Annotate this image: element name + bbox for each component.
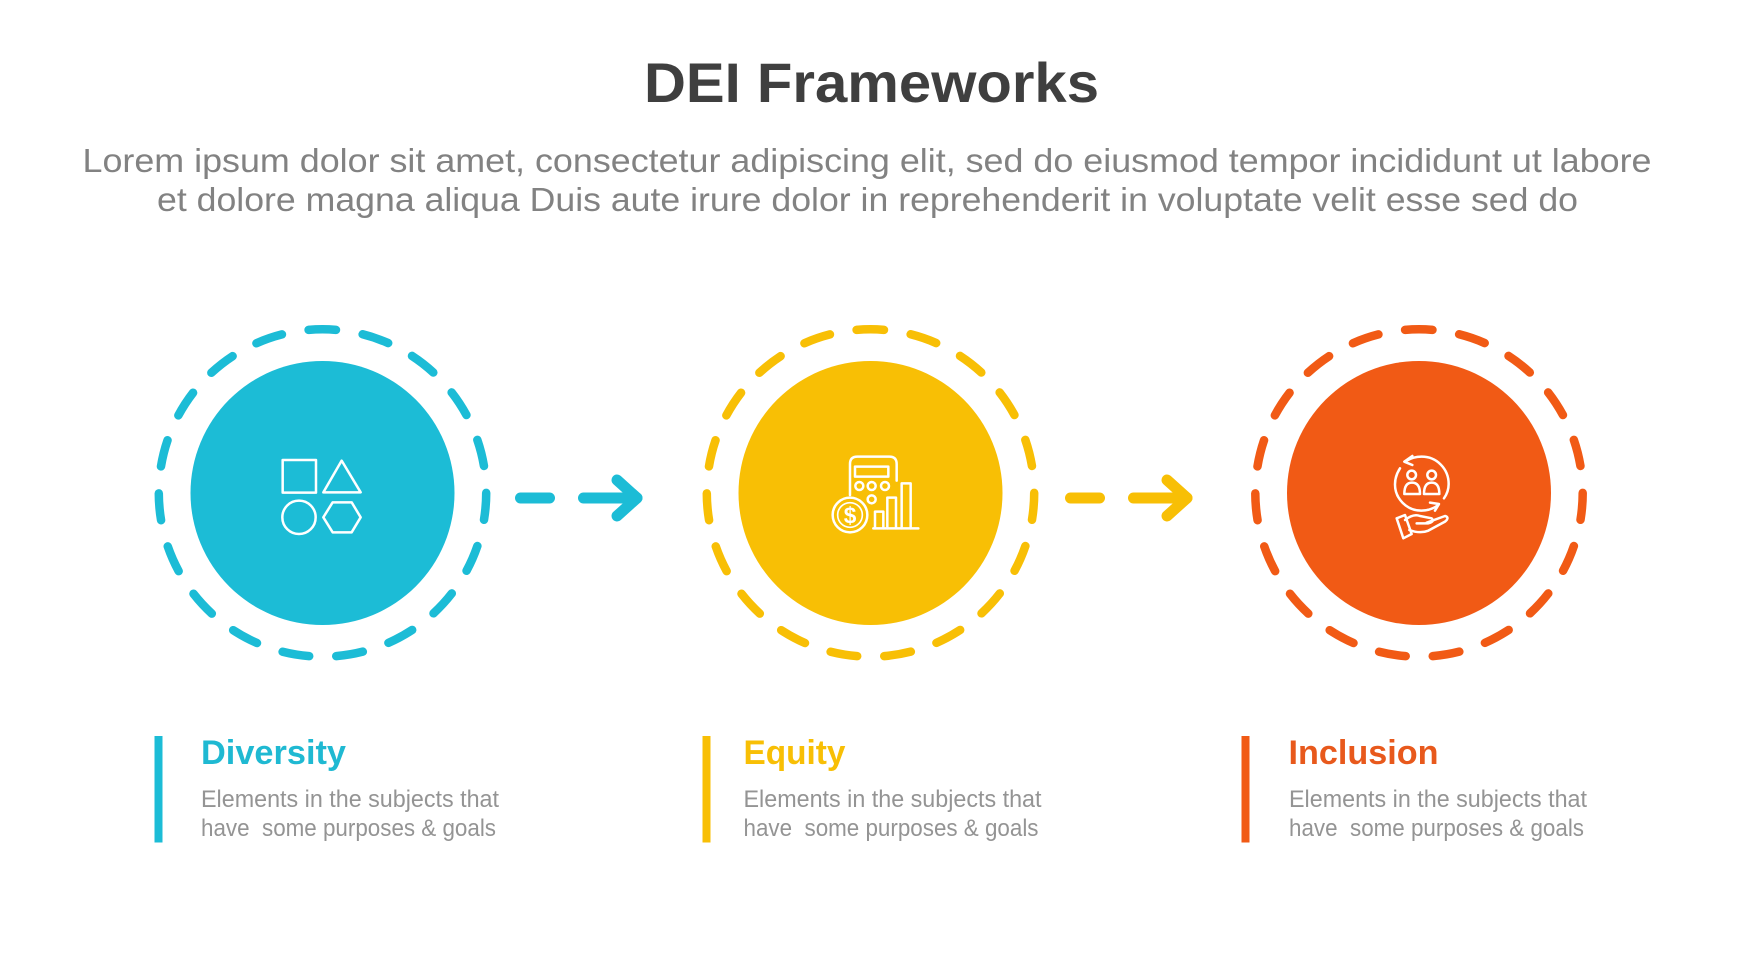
title: DEI Frameworks	[644, 51, 1099, 114]
subtitle text block	[82, 143, 1652, 219]
description: equity	[744, 786, 1042, 842]
icon: people in cycle over hand	[1395, 456, 1449, 538]
filled circle: inclusion	[1287, 361, 1551, 625]
dashed ring: diversity	[159, 329, 486, 657]
text block: diversity	[154, 734, 499, 842]
icon: calculator, coin and bars: $	[844, 502, 857, 528]
dashed ring: equity	[707, 329, 1034, 657]
description: diversity: have some purposes & goals	[201, 815, 496, 842]
heading: diversity: Diversity	[201, 734, 346, 772]
filled circle: diversity	[190, 361, 454, 625]
description: diversity: Elements in the subjects that	[201, 786, 499, 813]
icon: shapes	[282, 460, 361, 534]
icon: calculator, coin and bars	[833, 457, 918, 532]
heading: inclusion: Inclusion	[1288, 734, 1438, 772]
description: inclusion	[1289, 786, 1587, 842]
description: equity: Elements in the subjects that	[744, 786, 1042, 813]
panel: inclusion circle	[1255, 329, 1583, 657]
text block: inclusion	[1242, 734, 1587, 842]
heading: equity: Equity	[744, 734, 846, 772]
description: diversity	[201, 786, 499, 842]
subtitle text block: Lorem ipsum dolor sit amet, consectetur adipiscing elit, sed do eiusmod tempor incididunt ut labore	[82, 143, 1652, 180]
arrow: diversity to equity	[520, 480, 637, 516]
description: equity: have some purposes & goals	[744, 815, 1038, 842]
accent bar: equity	[702, 736, 710, 842]
panel: equity circle	[707, 329, 1034, 657]
accent bar: diversity	[154, 736, 162, 842]
arrow: equity to inclusion	[1070, 480, 1187, 516]
dashed ring: inclusion	[1255, 329, 1583, 657]
accent bar: inclusion	[1242, 736, 1250, 842]
text block: equity	[702, 734, 1042, 842]
description: inclusion: have some purposes & goals	[1289, 815, 1584, 842]
filled circle: equity	[738, 361, 1002, 625]
description: inclusion: Elements in the subjects that	[1289, 786, 1587, 813]
panel: diversity circle	[159, 329, 486, 657]
subtitle text block: et dolore magna aliqua Duis aute irure dolor in reprehenderit in voluptate velit esse sed do	[157, 182, 1578, 219]
